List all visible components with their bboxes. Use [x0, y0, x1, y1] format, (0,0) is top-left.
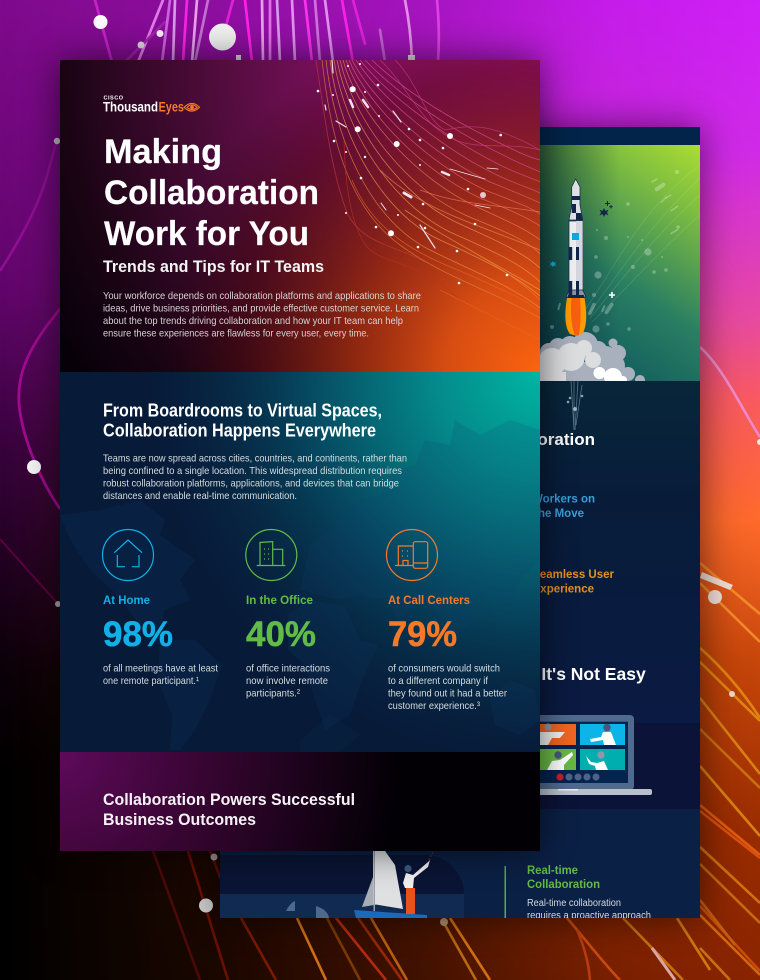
section heading: Collaboration Powers Successful — [103, 790, 355, 809]
video tile: orange — [540, 724, 576, 745]
stat: in the office — [246, 530, 330, 700]
back page text block: real-time collaboration: Real-time collaboration — [527, 898, 621, 909]
section paragraph: Teams are now spread across cities, countries, and continents, rather than — [103, 453, 407, 465]
intro paragraph — [103, 290, 421, 339]
section paragraph — [103, 453, 407, 502]
title — [104, 133, 319, 253]
stars — [550, 201, 615, 298]
stat: at call centers: customer experience.³ — [388, 700, 480, 712]
section heading: Business Outcomes — [103, 810, 256, 829]
back page rocket panel — [540, 145, 700, 381]
stat: in the office: participants.² — [246, 688, 300, 700]
man pointing — [403, 852, 433, 914]
subtitle: Trends and Tips for IT Teams — [103, 257, 324, 276]
icon: office buildings — [246, 530, 297, 580]
icon: building and phone — [386, 530, 438, 580]
front page hero panel — [60, 60, 540, 372]
back page text block: real-time collaboration: Collaboration — [527, 879, 600, 891]
stat: at call centers: they found out it had a better — [388, 688, 507, 700]
section heading: From Boardrooms to Virtual Spaces, — [103, 401, 382, 421]
rocket traces and particles — [550, 165, 700, 333]
logo: Cisco ThousandEyes: CISCO — [104, 96, 124, 102]
intro paragraph: ensure these experiences are flawless for every user, every time. — [103, 327, 369, 339]
front page panel: everywhere — [60, 372, 540, 752]
page 1 shadow — [60, 60, 540, 851]
section paragraph: being confined to a single location. This widespread distribution requires — [103, 465, 402, 477]
stat: at call centers: of consumers would switch — [388, 663, 500, 675]
background network traces, right — [700, 347, 760, 980]
stat: at home — [102, 530, 218, 687]
section paragraph: distances and enable real-time communication. — [103, 490, 297, 502]
rocket flame — [565, 298, 586, 336]
intro paragraph: about the top trends driving collaboration and how your IT team can help — [103, 315, 403, 327]
back page label: workers on the move — [540, 494, 594, 517]
intro paragraph: ideas, drive business priorities, and provide effective customer service. Learn — [103, 302, 419, 314]
call control dots — [556, 774, 600, 780]
stat: at call centers: At Call Centers — [388, 595, 470, 607]
rocket body — [566, 179, 586, 298]
stat: in the office: now involve remote — [246, 675, 328, 687]
laptop video call illustration — [540, 715, 652, 795]
back page text block: real-time collaboration: requires a proactive approach — [527, 911, 651, 922]
back page label: seamless user experience: Seamless User — [532, 569, 615, 581]
back page label: workers on the move: the Move — [534, 508, 584, 520]
boat hull — [354, 910, 427, 918]
video tile: blue — [580, 724, 625, 745]
logo: Cisco ThousandEyes — [103, 96, 200, 114]
back page text block: real-time collaboration: Real-time — [527, 865, 578, 877]
world map backdrop — [60, 420, 540, 752]
back page label: workers on the move: Workers on — [532, 494, 595, 506]
front page panel: business outcomes — [60, 752, 540, 851]
sail — [362, 851, 403, 911]
intro paragraph: Your workforce depends on collaboration platforms and applications to share — [103, 290, 421, 302]
stat: at home: 98% — [103, 615, 173, 654]
title: Work for You — [104, 215, 309, 253]
back page heading: collaboration: Collaboration — [485, 430, 595, 449]
back page: rear brochure sheet — [220, 127, 700, 922]
section heading — [103, 790, 355, 829]
logo: Cisco ThousandEyes: Thousand — [103, 100, 158, 114]
back page top band — [558, 127, 700, 145]
stat: in the office: 40% — [246, 615, 316, 654]
back page laptop band — [540, 723, 700, 809]
divider line: real-time collaboration — [504, 866, 506, 918]
logo: Cisco ThousandEyes: Eyes — [158, 100, 184, 114]
title: Making — [104, 133, 222, 171]
background network traces, bottom — [153, 851, 735, 980]
back page text block: real-time collaboration — [527, 865, 651, 922]
video tile: teal — [580, 749, 625, 770]
page 2 shadow — [220, 127, 700, 918]
hero network fan illustration — [316, 60, 540, 340]
stat: in the office: In the Office — [246, 595, 313, 607]
stat: at call centers: 79% — [388, 615, 457, 654]
section paragraph: robust collaboration platforms, applications, and devices that can bridge — [103, 478, 399, 490]
back page label: seamless user experience — [540, 569, 614, 595]
rocket exhaust streaks — [567, 381, 583, 430]
title: Collaboration — [104, 174, 319, 212]
video tile: green — [540, 749, 576, 770]
icon: logo eye — [184, 103, 200, 111]
background network traces, top — [95, 0, 439, 62]
stat: in the office: of office interactions — [246, 663, 330, 675]
stat: at home: At Home — [103, 595, 150, 607]
sailboat scene — [220, 851, 464, 918]
stat: at call centers: to a different company if — [388, 675, 488, 687]
back page heading: it's not easy: But It's Not Easy — [507, 664, 646, 684]
icon: house — [102, 530, 154, 580]
shark fins — [286, 901, 329, 918]
back page dark content section — [544, 381, 700, 584]
section heading: Collaboration Happens Everywhere — [103, 421, 376, 441]
background network traces, left — [0, 142, 60, 604]
stat: at call centers — [386, 530, 507, 712]
smoke cloud — [540, 332, 645, 381]
stat: at home: one remote participant.¹ — [103, 675, 199, 687]
stat: at home: of all meetings have at least — [103, 663, 218, 675]
back page label: seamless user experience: Experience — [533, 584, 594, 596]
section heading — [103, 401, 382, 441]
